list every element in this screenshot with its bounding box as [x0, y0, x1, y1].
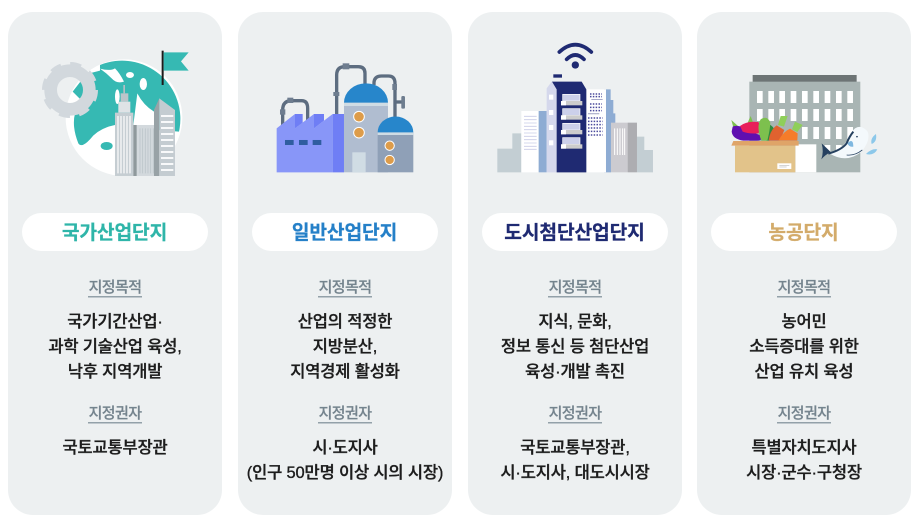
text: purpose: [501, 312, 649, 381]
text: authority: [247, 438, 443, 482]
text: authority: 국토교통부장관: [62, 438, 168, 457]
text: authority: 국토교통부장관,: [520, 438, 630, 457]
panel: national industrial complex: [8, 12, 222, 515]
label: designating authority: 지정권자: [89, 405, 142, 422]
text: authority: [500, 438, 650, 482]
panel: general industrial complex: [238, 12, 452, 515]
text: authority: 시·도지사: [312, 438, 378, 457]
text: authority: 시·도지사, 대도시시장: [500, 463, 650, 482]
label: designation purpose: 지정목적: [319, 279, 371, 296]
icon: wifi and smart city buildings: [497, 45, 653, 172]
text: authority: [746, 438, 862, 482]
label: designating authority: 지정권자: [549, 405, 602, 422]
text: purpose: [749, 312, 859, 381]
text: purpose: 소득증대를 위한: [749, 337, 859, 356]
title pill: 농공단지: [768, 222, 839, 244]
text: purpose: 낙후 지역개발: [68, 362, 162, 381]
text: purpose: 산업 유치 육성: [755, 362, 853, 381]
icon: globe, gear, flag and towers: [45, 51, 189, 176]
text: purpose: 지식, 문화,: [538, 312, 612, 331]
label: designation purpose: 지정목적: [778, 279, 830, 296]
panel: agro-industrial complex: [697, 12, 911, 515]
title pill: 일반산업단지: [292, 222, 397, 244]
text: purpose: 과학 기술산업 육성,: [48, 337, 182, 356]
text: purpose: 국가기간산업·: [67, 312, 163, 331]
label: designation purpose: 지정목적: [89, 279, 141, 296]
title pill: 국가산업단지: [62, 222, 167, 244]
panel: urban high-tech industrial complex: [468, 12, 682, 515]
text: authority: 시장·군수·구청장: [746, 463, 862, 482]
label: designating authority: 지정권자: [319, 405, 372, 422]
text: purpose: 육성·개발 촉진: [525, 362, 625, 381]
text: purpose: 산업의 적정한: [298, 312, 392, 331]
text: purpose: [290, 312, 400, 381]
label: designation purpose: 지정목적: [549, 279, 601, 296]
title pill: [252, 213, 438, 251]
title pill: [22, 213, 208, 251]
text: purpose: 농어민: [781, 312, 827, 331]
icon: factory with tanks: [277, 63, 413, 172]
title pill: 도시첨단산업단지: [504, 222, 645, 244]
icon: building, produce box and fish: [731, 75, 877, 172]
label: designating authority: 지정권자: [778, 405, 831, 422]
text: purpose: 정보 통신 등 첨단산업: [501, 337, 649, 356]
text: purpose: 지역경제 활성화: [290, 362, 400, 381]
text: authority: (인구 50만명 이상 시의 시장): [247, 463, 443, 482]
title pill: [482, 213, 668, 251]
text: purpose: [48, 312, 182, 381]
text: authority: 특별자치도지사: [751, 438, 857, 457]
text: purpose: 지방분산,: [313, 337, 377, 356]
title pill: [711, 213, 897, 251]
